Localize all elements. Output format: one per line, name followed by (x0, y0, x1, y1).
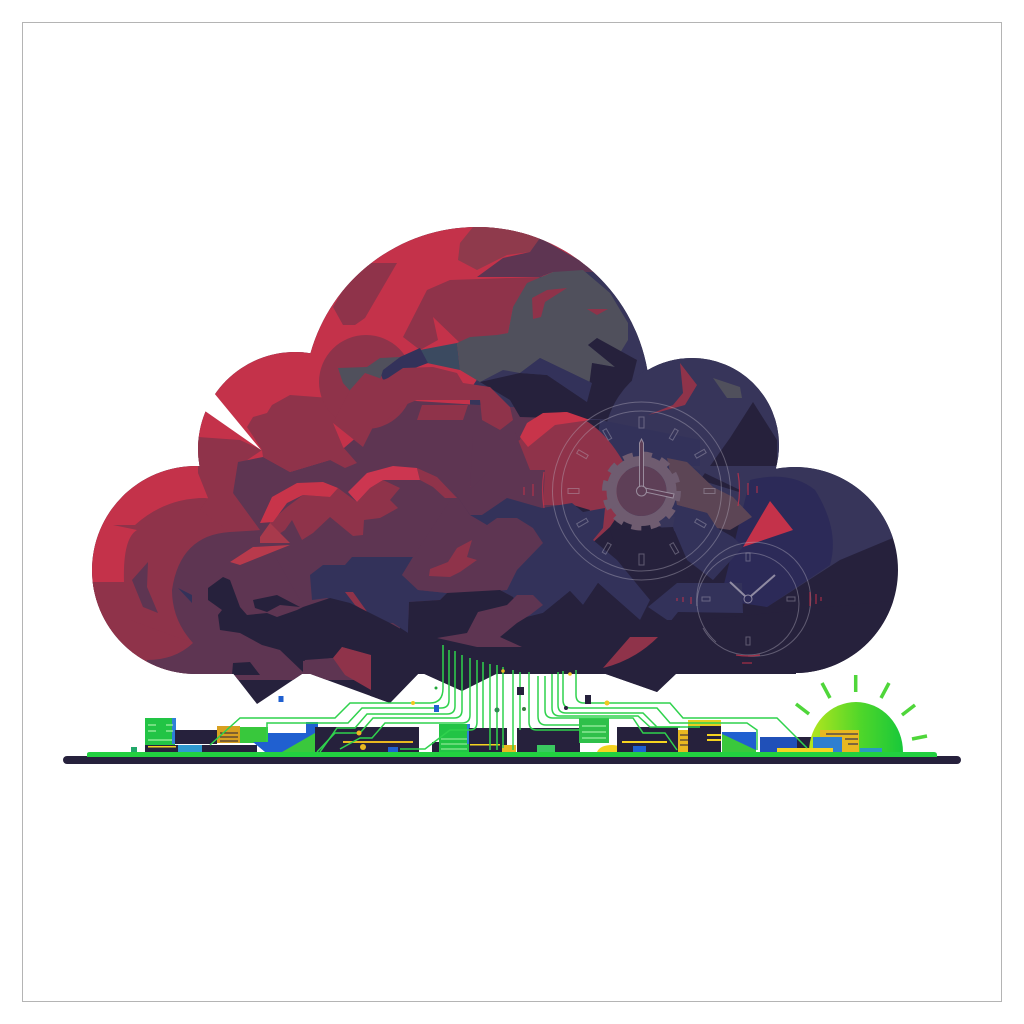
white notch in cloud (196, 385, 261, 450)
large clock with gear (552, 402, 730, 580)
small clock (697, 542, 811, 656)
clock ticks (568, 417, 715, 565)
right dark buildings (617, 727, 678, 752)
circuit nodes (278, 669, 610, 736)
right yellow building (777, 730, 882, 752)
red radar ticks (524, 472, 821, 663)
clock hands (636, 439, 674, 498)
central blue building (253, 742, 280, 752)
sun (796, 675, 927, 752)
left green building (145, 718, 175, 752)
green ground strip (87, 752, 937, 757)
gear (608, 458, 674, 524)
ground base bar (63, 756, 961, 764)
storm cloud (80, 210, 910, 710)
city skyline (131, 718, 815, 752)
circuit traces (210, 645, 807, 752)
center green building (439, 724, 469, 752)
sun rays (796, 675, 927, 739)
